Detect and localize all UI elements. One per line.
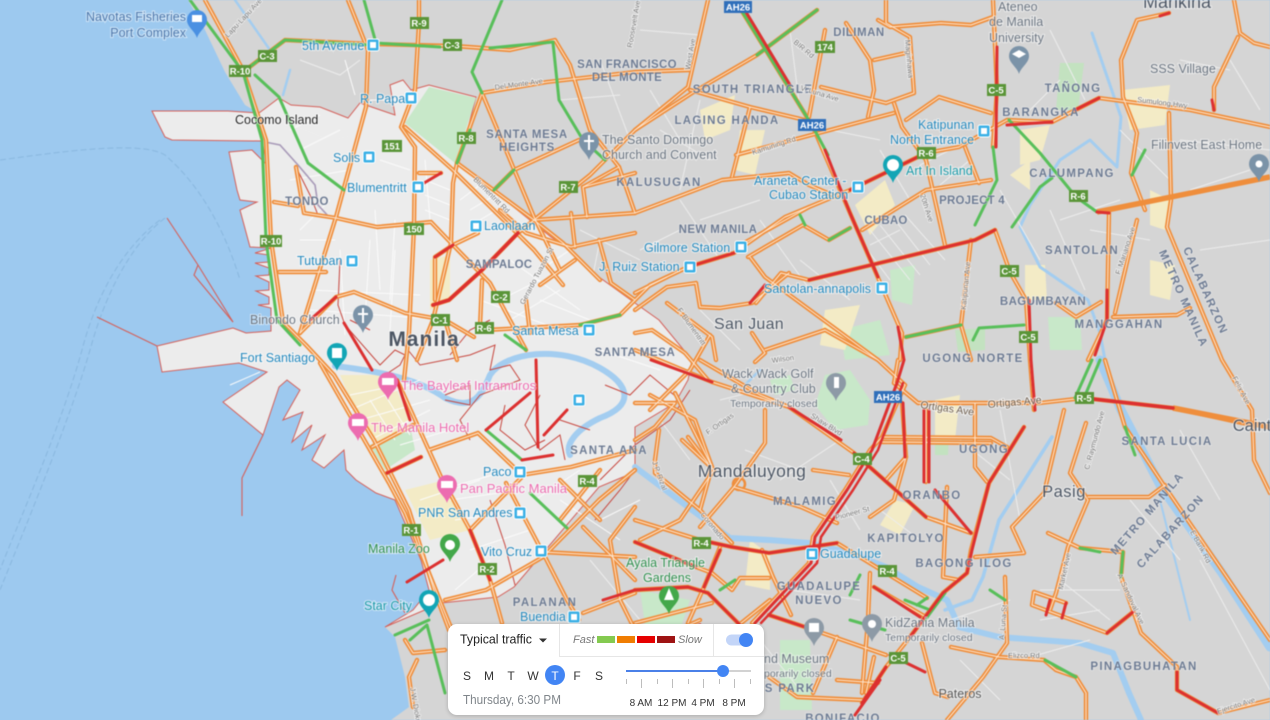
labels: road names: Roosevelt Ave bbox=[625, 0, 642, 48]
labels: districts: CALABARZON bbox=[1135, 493, 1207, 571]
labels: districts: UGONG bbox=[959, 444, 1009, 456]
labels: road names: Ortigas Ave bbox=[987, 394, 1042, 411]
Manila white street grid bbox=[230, 60, 660, 590]
labels: districts: PALANAN bbox=[513, 597, 577, 609]
pin: KidZania Manila bbox=[862, 614, 882, 642]
labels: cities: Mandaluyong bbox=[698, 461, 806, 481]
shield C-3 east: C-3 bbox=[444, 40, 460, 52]
day selector: T bbox=[507, 669, 515, 683]
shield C-4: C-4 bbox=[854, 454, 870, 466]
labels: road names: Pioneer St bbox=[834, 504, 871, 522]
labels: cities: San Juan bbox=[714, 316, 784, 333]
labels: districts: LAGING HANDA bbox=[674, 115, 780, 127]
labels: districts: MALAMIG bbox=[773, 496, 837, 508]
sea wall lines bbox=[97, 218, 405, 613]
pin: Ateneo de Manila University bbox=[1009, 46, 1029, 74]
shield R-6 Cubao: R-6 bbox=[918, 148, 934, 160]
labels: points of interest: Ayala Triangle bbox=[626, 556, 705, 570]
labels: points of interest: SSS Village bbox=[1150, 62, 1216, 76]
shield C-3 west: C-3 bbox=[259, 52, 275, 62]
labels: transit stations: Gilmore Station bbox=[644, 241, 730, 255]
time slider: 12 PM bbox=[658, 698, 686, 709]
legend: speed scale: Fast bbox=[573, 634, 595, 646]
labels: cities: Pateros bbox=[938, 687, 982, 701]
labels: road names: Gerardo Tuazon St bbox=[518, 245, 556, 306]
labels: road names: Del Monte Ave bbox=[494, 76, 543, 92]
labels: points of interest: Cocomo Island bbox=[235, 113, 318, 127]
labels: transit stations bbox=[240, 39, 974, 624]
labels: road names: Felix Ave bbox=[1230, 375, 1252, 406]
pin: Art In Island bbox=[883, 155, 903, 183]
pin: The Bayleaf Intramuros bbox=[378, 372, 398, 400]
labels: road names: Market Ave bbox=[1056, 552, 1073, 590]
pin: Wack Wack Golf bbox=[826, 373, 846, 401]
labels: road names: Coronado bbox=[698, 511, 727, 542]
labels: districts: SANTOLAN bbox=[1045, 245, 1119, 257]
labels: points of interest: University bbox=[989, 31, 1045, 45]
labels: transit stations: Paco bbox=[483, 465, 512, 479]
labels: districts: CALUMPANG bbox=[1029, 168, 1115, 180]
labels: transit stations: Santolan-annapolis bbox=[764, 282, 871, 296]
green fast traffic segments bbox=[190, 0, 1145, 693]
day selector: S bbox=[463, 669, 471, 683]
labels: transit stations: Araneta Center - bbox=[754, 174, 846, 188]
shield R-4 Mandaluyong: R-4 bbox=[693, 538, 709, 550]
shield C-2: C-2 bbox=[492, 292, 508, 304]
day selector: F bbox=[573, 669, 581, 683]
legend: speed scale: Slow bbox=[678, 634, 703, 646]
thick orange expressway bbox=[1097, 177, 1270, 427]
place pins bbox=[187, 10, 1269, 646]
labels: road names: Ortigas Ave bbox=[920, 399, 975, 419]
pin: Filinvest East Homes bbox=[1249, 154, 1269, 182]
labels: districts: SOUTH TRIANGLE bbox=[693, 84, 813, 96]
labels: districts: DILIMAN bbox=[833, 27, 885, 39]
shield R-4 east: R-4 bbox=[879, 566, 895, 578]
labels: road names: Kamuning Rd bbox=[751, 134, 797, 157]
shield R-10 south: R-10 bbox=[261, 236, 281, 248]
shield AH26 south: AH26 bbox=[876, 392, 900, 404]
shield C-5 south: C-5 bbox=[890, 654, 906, 664]
shield 174: 174 bbox=[817, 42, 834, 54]
commercial zones bbox=[340, 85, 1175, 680]
pin: Navotas Fisheries shopping bbox=[187, 10, 207, 38]
shield R-1: R-1 bbox=[403, 526, 419, 536]
labels: transit stations: Cubao Station bbox=[769, 188, 848, 202]
labels: points of interest: porarily closed bbox=[764, 668, 832, 680]
labels: districts: SANTA LUCIA bbox=[1122, 436, 1212, 448]
shield C-5: C-5 bbox=[1001, 266, 1017, 278]
labels: points of interest: de Manila bbox=[989, 15, 1043, 29]
toggle switch bbox=[726, 633, 753, 647]
labels: districts: METRO MANILA bbox=[1156, 248, 1210, 349]
shield C-5 Katipunan: C-5 bbox=[988, 86, 1004, 96]
labels: transit stations: North Entrance bbox=[890, 133, 974, 147]
labels: districts: SANTA ANA bbox=[570, 445, 648, 457]
labels: transit stations: Solis bbox=[333, 151, 360, 165]
shield C-5 Bagumbayan: C-5 bbox=[1020, 332, 1036, 344]
labels: districts: SAN FRANCISCO bbox=[577, 59, 677, 71]
pin: museum bbox=[804, 618, 824, 646]
labels: cities: Pasig bbox=[1042, 483, 1086, 501]
shield 174 bbox=[815, 41, 835, 54]
labels: districts bbox=[285, 27, 1229, 720]
labels: road names: BIR Rd bbox=[792, 38, 816, 60]
labels: districts: SAMPALOC bbox=[466, 259, 532, 271]
red slow traffic segments bbox=[310, 12, 1218, 715]
transit station icons bbox=[346, 39, 990, 623]
labels: road names: Wilson bbox=[771, 353, 795, 365]
labels: road names: C. Raymundo Ave bbox=[1082, 410, 1107, 471]
labels: points of interest: Temporarily closed bbox=[730, 398, 818, 410]
day selector: S bbox=[595, 669, 603, 683]
labels: points of interest: KidZania Manila bbox=[885, 616, 975, 630]
labels: transit stations: Fort Santiago bbox=[240, 351, 315, 365]
shield AH26 middle: AH26 bbox=[800, 120, 824, 132]
labels: districts: BAGUMBAYAN bbox=[1000, 296, 1086, 308]
labels: cities: Manila bbox=[388, 328, 460, 351]
labels: districts: PINAGBUHATAN bbox=[1090, 661, 1198, 673]
labels: road names: A. Luna St bbox=[997, 604, 1009, 640]
pin: Binondo church bbox=[353, 305, 373, 333]
shield 151 bbox=[382, 140, 402, 152]
labels: road names: V. Luna Ave bbox=[799, 83, 840, 103]
labels: road names: F. Ortigas bbox=[704, 411, 736, 437]
labels: transit stations: Blumentritt bbox=[347, 181, 407, 195]
labels: road names: F. Mariano Ave bbox=[1113, 226, 1137, 276]
pin: The Manila Hotel bbox=[348, 413, 368, 441]
labels: districts: NUEVO bbox=[795, 595, 843, 607]
shield AH26 north: AH26 bbox=[726, 2, 750, 14]
labels: districts: HEIGHTS bbox=[499, 142, 555, 154]
labels: cities bbox=[388, 0, 1270, 701]
labels: districts: SANTA MESA bbox=[595, 347, 675, 359]
labels: points of interest: Wack Wack Golf bbox=[722, 367, 814, 381]
labels: districts: DEL MONTE bbox=[592, 72, 662, 84]
Manila city area, lighter land bbox=[152, 80, 692, 627]
labels: transit stations: Tutuban bbox=[297, 254, 342, 268]
labels: transit stations: PNR San Andres bbox=[418, 506, 512, 520]
labels: road names: E Bank Rd bbox=[1188, 529, 1213, 565]
labels: road names: J.P. Rizal bbox=[650, 460, 669, 492]
labels: districts: ORANBO bbox=[903, 490, 961, 502]
selected time: Thursday, 6:30 PM bbox=[463, 693, 561, 707]
labels: road names: F. Blumentritt bbox=[675, 306, 708, 348]
labels: districts: CUBAO bbox=[864, 215, 908, 227]
Tondo boundary channel bbox=[265, 142, 330, 218]
labels: points of interest: nd Museum bbox=[764, 652, 829, 666]
labels: districts: S PARK bbox=[765, 683, 815, 695]
labels: road names: Ejercito Ave bbox=[1216, 695, 1256, 716]
shield R-6 east: R-6 bbox=[1070, 192, 1086, 202]
pin: Santo Domingo church bbox=[579, 132, 599, 160]
time slider: 8 PM bbox=[722, 698, 746, 709]
labels: districts: UGONG NORTE bbox=[922, 353, 1024, 365]
labels: districts: MANGGAHAN bbox=[1074, 319, 1164, 331]
shield C-1: C-1 bbox=[432, 316, 448, 326]
labels: points of interest: Port Complex bbox=[110, 26, 187, 40]
labels: districts: TONDO bbox=[285, 196, 329, 208]
labels: road names: 20th Ave bbox=[918, 193, 936, 223]
pin: Pan Pacific Manila bbox=[437, 475, 457, 503]
parks bbox=[370, 63, 1084, 710]
labels: points of interest: Manila Zoo bbox=[368, 542, 430, 556]
labels: districts: KALUSUGAN bbox=[616, 177, 702, 189]
pin: Star City bbox=[419, 590, 439, 618]
Mandaluyong rotonda bbox=[733, 478, 745, 490]
labels: transit stations: Laonlaan bbox=[484, 219, 535, 233]
shield R-9: R-9 bbox=[411, 18, 427, 30]
labels: districts: TAÑONG bbox=[1045, 82, 1101, 95]
shield R-8: R-8 bbox=[458, 134, 474, 144]
labels: transit stations: 5th Avenue bbox=[302, 39, 364, 53]
day selector: T bbox=[551, 669, 559, 683]
labels: transit stations: J. Ruiz Station bbox=[599, 260, 680, 274]
panel dividers bbox=[560, 624, 764, 656]
labels: transit stations: R. Papa bbox=[360, 92, 405, 106]
labels: points of interest: Pan Pacific Manila bbox=[460, 481, 568, 496]
labels: districts: SANTA MESA bbox=[486, 129, 568, 141]
pin: Ayala Triangle Gardens bbox=[659, 586, 679, 614]
labels: transit stations: Buendia bbox=[520, 610, 566, 624]
labels: districts: BAGONG ILOG bbox=[915, 558, 1013, 570]
labels: districts: GUADALUPE bbox=[777, 581, 861, 593]
labels: transit stations: Guadalupe bbox=[820, 547, 881, 561]
labels: road names: Sumulong Hwy bbox=[1137, 95, 1188, 110]
labels: districts: BARANGKA bbox=[1002, 107, 1080, 119]
shield R-5: R-5 bbox=[1076, 394, 1092, 404]
shield 150 bbox=[404, 223, 424, 236]
road shields bbox=[229, 1, 1094, 664]
labels: districts: METRO MANILA bbox=[1109, 470, 1187, 558]
day selector: W bbox=[527, 669, 539, 683]
labels: points of interest: The Manila Hotel bbox=[371, 420, 469, 435]
labels: points of interest: Star City bbox=[364, 599, 413, 613]
shield 151: 151 bbox=[384, 142, 401, 152]
controls drawing bbox=[460, 624, 764, 709]
labels: transit stations: Katipunan bbox=[918, 118, 974, 132]
labels: points of interest: Gardens bbox=[643, 571, 691, 585]
labels: districts: PROJECT 4 bbox=[939, 195, 1005, 207]
pin: Manila Zoo bbox=[440, 534, 460, 562]
labels: road names: A. Sandoval Ave bbox=[1115, 572, 1147, 626]
labels: points of interest: The Bayleaf Intramuros bbox=[401, 378, 537, 393]
legend: speed scale bbox=[573, 634, 703, 646]
shield 150: 150 bbox=[406, 224, 422, 236]
labels: transit stations: Vito Cruz bbox=[481, 545, 532, 559]
heading: Typical traffic dropdown: Typical traffic bbox=[460, 632, 532, 646]
shipping lanes bbox=[0, 148, 240, 590]
time slider: 4 PM bbox=[691, 698, 715, 709]
labels: road names: West Ave bbox=[683, 38, 697, 70]
minor streets bbox=[280, 30, 1270, 710]
thin barangay boundary lines bbox=[296, 167, 690, 585]
shield R-7: R-7 bbox=[560, 182, 576, 194]
shield R-4 west: R-4 bbox=[579, 476, 595, 488]
labels: points of interest: Church and Convent bbox=[602, 148, 717, 162]
labels: points of interest: Temporarily closed bbox=[885, 632, 973, 644]
labels: road names: Katipunan Ave bbox=[959, 261, 972, 310]
labels: road names: Shaw Blvd bbox=[809, 411, 844, 437]
time slider: 8 AM bbox=[630, 698, 652, 709]
labels: points of interest: Navotas Fisheries bbox=[86, 10, 186, 24]
day selector: M bbox=[484, 669, 494, 683]
shield R-6 Manila: R-6 bbox=[476, 324, 492, 334]
labels: points of interest: Filinvest East Home bbox=[1151, 138, 1262, 152]
day selector bbox=[463, 665, 603, 685]
labels: districts: KAPITOLYO bbox=[867, 533, 945, 545]
shield R-10 north: R-10 bbox=[230, 66, 250, 78]
panel: traffic controls bbox=[448, 624, 764, 715]
labels: districts: NEW MANILA bbox=[679, 224, 757, 236]
labels: points of interest: The Santo Domingo bbox=[602, 133, 713, 147]
labels: points of interest: Art In Island bbox=[906, 164, 973, 178]
labels: points of interest: Binondo Church bbox=[250, 313, 340, 327]
labels: points of interest: & Country Club bbox=[731, 382, 816, 396]
time slider bbox=[626, 665, 751, 709]
shield R-2: R-2 bbox=[479, 564, 495, 576]
labels: road names: Elizco Rd bbox=[1008, 651, 1040, 660]
labels: road names: Maginhawa bbox=[903, 39, 915, 79]
labels: road names: Blumentritt Rd bbox=[472, 175, 512, 215]
pin: Fort Santiago bbox=[327, 343, 347, 371]
labels: transit stations: Santa Mesa bbox=[512, 324, 579, 338]
labels: points of interest: Ateneo bbox=[998, 0, 1038, 14]
labels: districts: CALABARZON bbox=[1180, 245, 1229, 336]
